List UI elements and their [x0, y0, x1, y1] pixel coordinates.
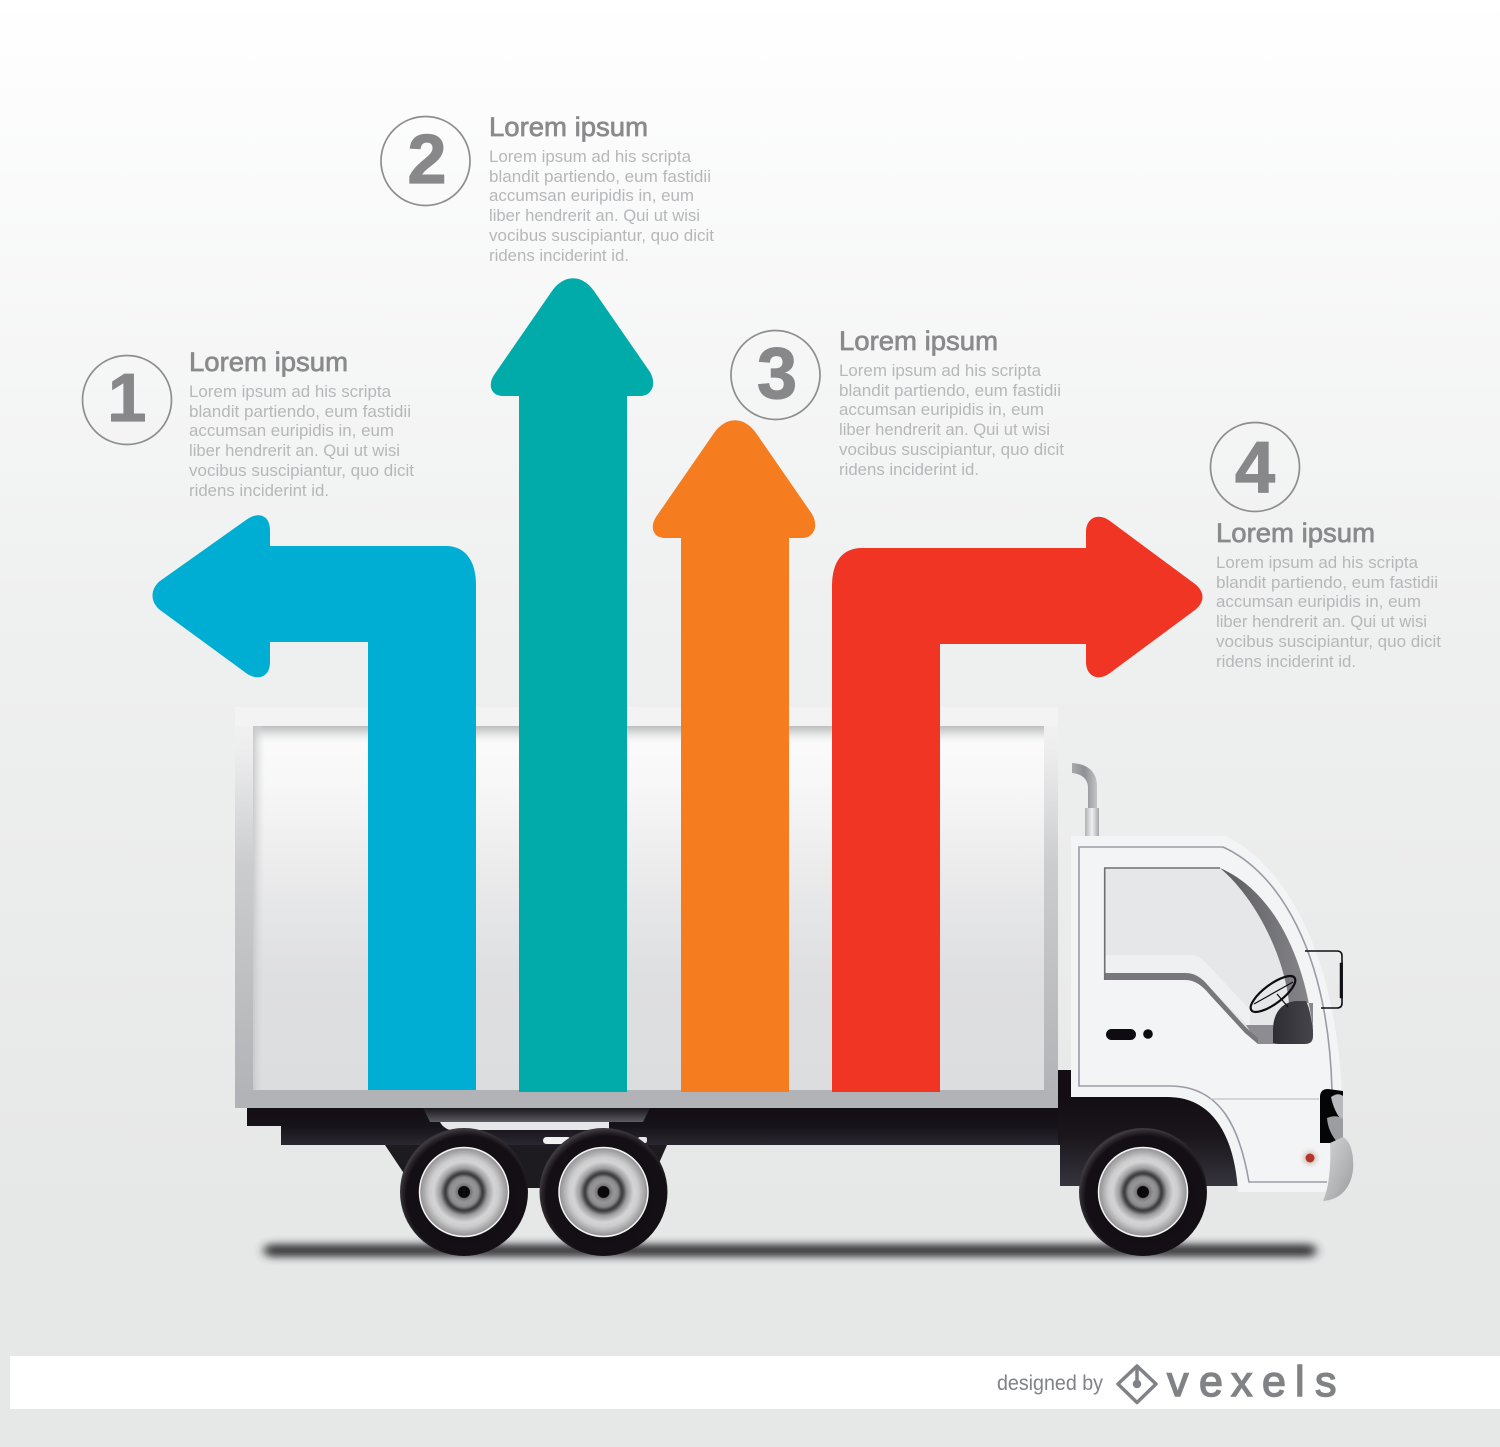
- body 4: accumsan euripidis in, eum: [1216, 592, 1421, 611]
- body 1: Lorem ipsum ad his scripta: [189, 382, 392, 401]
- text block 2: [489, 112, 714, 265]
- text block 3: [839, 326, 1064, 479]
- cargo box: [235, 707, 1058, 1108]
- body 3: Lorem ipsum ad his scripta: [839, 361, 1042, 380]
- body 4: ridens inciderint id.: [1216, 652, 1356, 671]
- exhaust pipe: [1072, 763, 1099, 837]
- body 2: blandit partiendo, eum fastidii: [489, 167, 711, 186]
- badge 1: [82, 356, 172, 444]
- text block 1: [189, 347, 414, 500]
- wheel 1: [400, 1128, 528, 1256]
- cab trim line: [1079, 847, 1332, 1182]
- body 3: [839, 361, 1064, 479]
- body 1: [189, 382, 414, 500]
- steering wheel: [1246, 970, 1300, 1018]
- body 1: liber hendrerit an. Qui ut wisi: [189, 441, 400, 460]
- badge 2: 2: [408, 120, 446, 198]
- body 4: [1216, 553, 1441, 671]
- wheel 2: [540, 1128, 668, 1256]
- heading 4: Lorem ipsum: [1216, 518, 1375, 548]
- body 2: accumsan euripidis in, eum: [489, 186, 694, 205]
- ground shadow: [264, 1244, 1316, 1257]
- arrow 2: teal up: [491, 278, 653, 1092]
- wheel 3: [1079, 1128, 1207, 1256]
- body 1: ridens inciderint id.: [189, 481, 329, 500]
- arrow 1: blue left: [152, 515, 476, 1090]
- truck: [235, 707, 1353, 1256]
- badge 4: 4: [1235, 428, 1275, 508]
- heading 3: Lorem ipsum: [839, 326, 998, 356]
- icon: vexels logo: [1118, 1366, 1156, 1402]
- body 4: vocibus suscipiantur, quo dicit: [1216, 632, 1441, 651]
- body 3: liber hendrerit an. Qui ut wisi: [839, 420, 1050, 439]
- badge 3: 3: [757, 334, 797, 414]
- wheel arch: [1058, 1097, 1238, 1186]
- body 2: vocibus suscipiantur, quo dicit: [489, 226, 714, 245]
- text block 4: [1216, 518, 1441, 671]
- heading 2: Lorem ipsum: [489, 112, 648, 142]
- badge 2: [381, 116, 470, 206]
- wordmark: vexels: vexels: [1167, 1358, 1336, 1406]
- body 1: vocibus suscipiantur, quo dicit: [189, 461, 414, 480]
- headlight: [1320, 1089, 1343, 1143]
- body 4: Lorem ipsum ad his scripta: [1216, 553, 1419, 572]
- cab window: [1104, 868, 1313, 1044]
- body 4: liber hendrerit an. Qui ut wisi: [1216, 612, 1427, 631]
- body 1: accumsan euripidis in, eum: [189, 421, 394, 440]
- door handle: [1106, 1029, 1153, 1040]
- body 3: accumsan euripidis in, eum: [839, 400, 1044, 419]
- tail light: [1303, 1151, 1317, 1165]
- badge 4: [1210, 422, 1300, 512]
- heading 1: Lorem ipsum: [189, 347, 348, 377]
- body 2: [489, 147, 714, 265]
- cab seam: [1210, 1098, 1319, 1100]
- axle plate: [423, 1108, 650, 1144]
- body 3: vocibus suscipiantur, quo dicit: [839, 440, 1064, 459]
- footer strip: [10, 1356, 1500, 1409]
- body 4: blandit partiendo, eum fastidii: [1216, 573, 1438, 592]
- bumper: [1323, 1137, 1353, 1201]
- body 1: blandit partiendo, eum fastidii: [189, 402, 411, 421]
- credit: designed by: designed by: [997, 1372, 1103, 1395]
- mirror: [1305, 951, 1343, 1008]
- body 2: liber hendrerit an. Qui ut wisi: [489, 206, 700, 225]
- arrow 4: red right: [832, 517, 1202, 1092]
- body 2: Lorem ipsum ad his scripta: [489, 147, 692, 166]
- body 3: ridens inciderint id.: [839, 460, 979, 479]
- badge 3: [731, 330, 820, 420]
- chassis: [247, 1070, 1073, 1188]
- badge 1: 1: [108, 360, 146, 436]
- body 2: ridens inciderint id.: [489, 246, 629, 265]
- arrow 3: orange up: [653, 420, 815, 1092]
- cab: [1071, 836, 1342, 1192]
- body 3: blandit partiendo, eum fastidii: [839, 381, 1061, 400]
